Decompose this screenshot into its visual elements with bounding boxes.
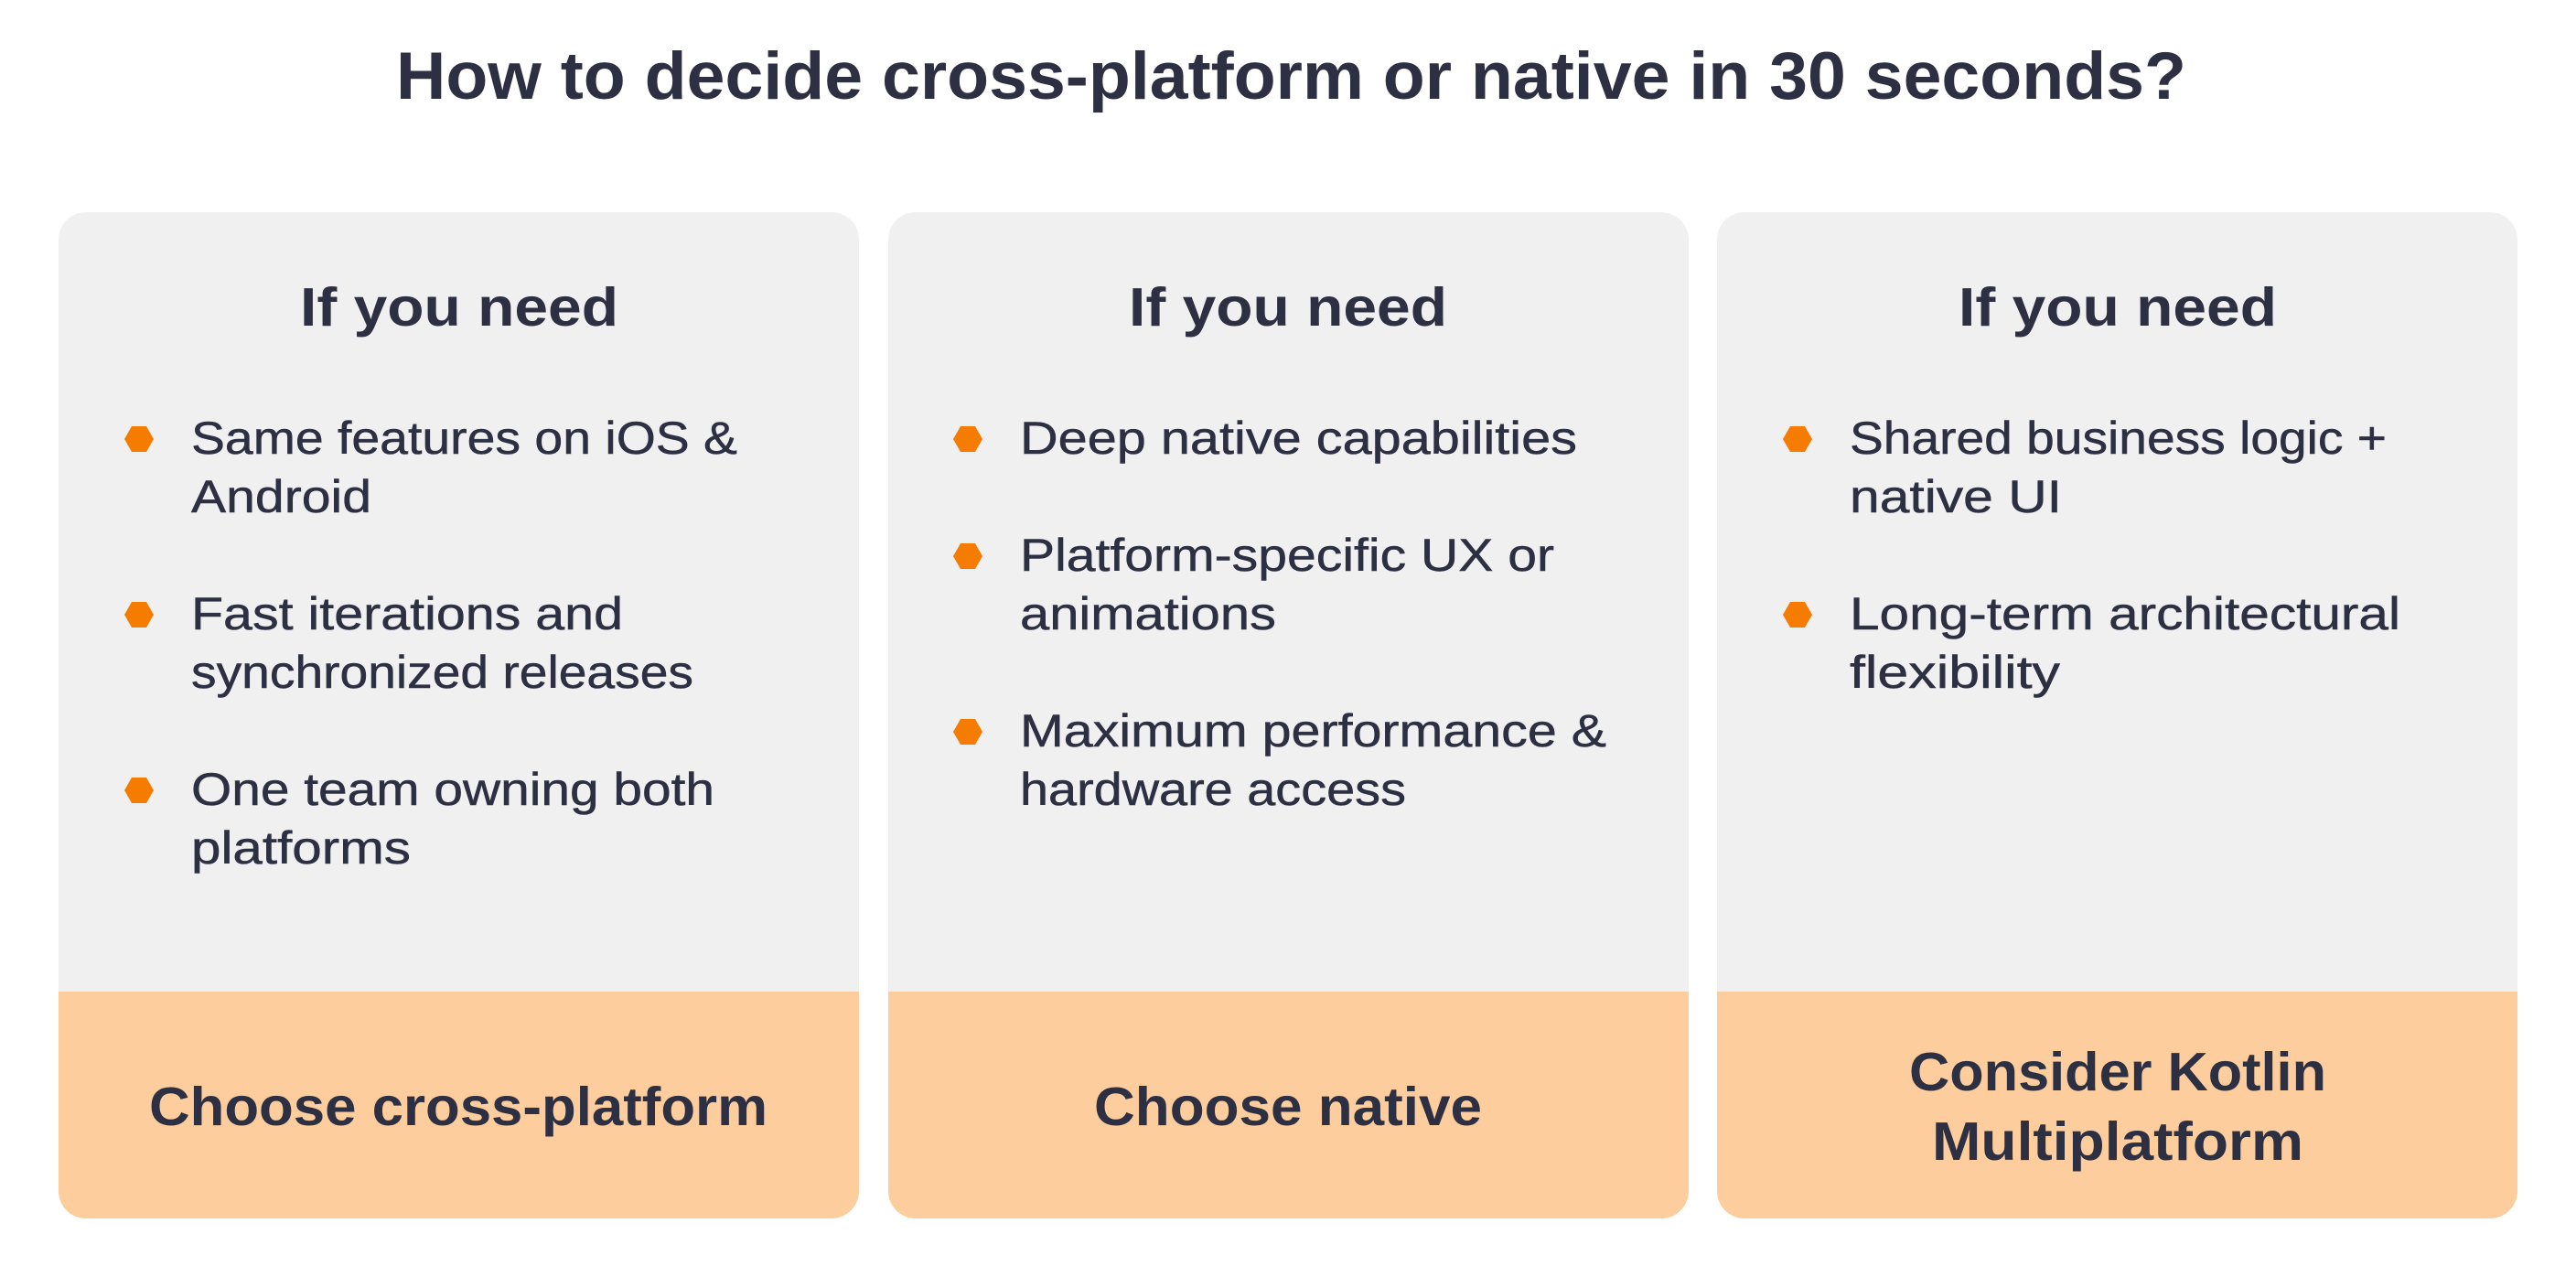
verdict band xyxy=(888,992,1689,1218)
bullet: long-term flexibility: flexibility xyxy=(1850,647,2060,698)
bullet: long-term flexibility xyxy=(1783,588,2400,698)
bullet: fast iterations: Fast iterations and xyxy=(191,588,623,639)
bullet list xyxy=(1783,413,2400,698)
panel: Kotlin Multiplatform xyxy=(1717,212,2517,1218)
bullet: shared business logic: native UI xyxy=(1850,471,2062,522)
bullet: same features: Android xyxy=(191,471,371,522)
bullet: maximum performance xyxy=(953,705,1606,815)
bullet: one team: platforms xyxy=(191,822,411,874)
verdict: consider Kotlin Multiplatform: Consider Kotlin xyxy=(1909,1042,2326,1102)
bullet: deep native: Deep native capabilities xyxy=(1020,413,1577,464)
bullet: one team: One team owning both xyxy=(191,764,714,815)
panel heading: If you need xyxy=(300,277,618,338)
bullet: platform-specific xyxy=(953,530,1554,639)
verdict: choose cross-platform: Choose cross-platform xyxy=(149,1077,767,1137)
bullet: maximum performance: Maximum performance & xyxy=(1020,705,1606,756)
verdict: consider Kotlin Multiplatform xyxy=(1909,1042,2326,1172)
bullet: long-term flexibility: Long-term architectural xyxy=(1850,588,2400,639)
verdict band xyxy=(59,992,859,1218)
bullet: maximum performance: hardware access xyxy=(1020,764,1406,815)
panel background xyxy=(888,212,1689,1218)
bullet: shared business logic: Shared business logic + xyxy=(1850,413,2387,464)
bullet: one team xyxy=(124,764,714,874)
panel: native xyxy=(888,212,1689,1218)
panel background xyxy=(59,212,859,1218)
verdict: choose native: Choose native xyxy=(1094,1077,1482,1137)
bullet: fast iterations: synchronized releases xyxy=(191,647,693,698)
panel background xyxy=(1717,212,2517,1218)
verdict: consider Kotlin Multiplatform: Multiplatform xyxy=(1932,1111,2303,1172)
bullet: platform-specific: animations xyxy=(1020,588,1276,639)
bullet: same features xyxy=(124,413,737,522)
panel: cross-platform xyxy=(59,212,859,1218)
bullet: same features: Same features on iOS & xyxy=(191,413,737,464)
verdict band xyxy=(1717,992,2517,1218)
title: How to decide cross-platform or native in 30 seconds? xyxy=(396,39,2186,113)
panel heading: If you need xyxy=(1959,277,2277,338)
bullet list xyxy=(953,413,1606,815)
bullet list xyxy=(124,413,737,874)
bullet: platform-specific: Platform-specific UX or xyxy=(1020,530,1554,581)
bullet: shared business logic xyxy=(1783,413,2387,522)
panel heading: If you need xyxy=(1129,277,1447,338)
bullet: fast iterations xyxy=(124,588,693,698)
